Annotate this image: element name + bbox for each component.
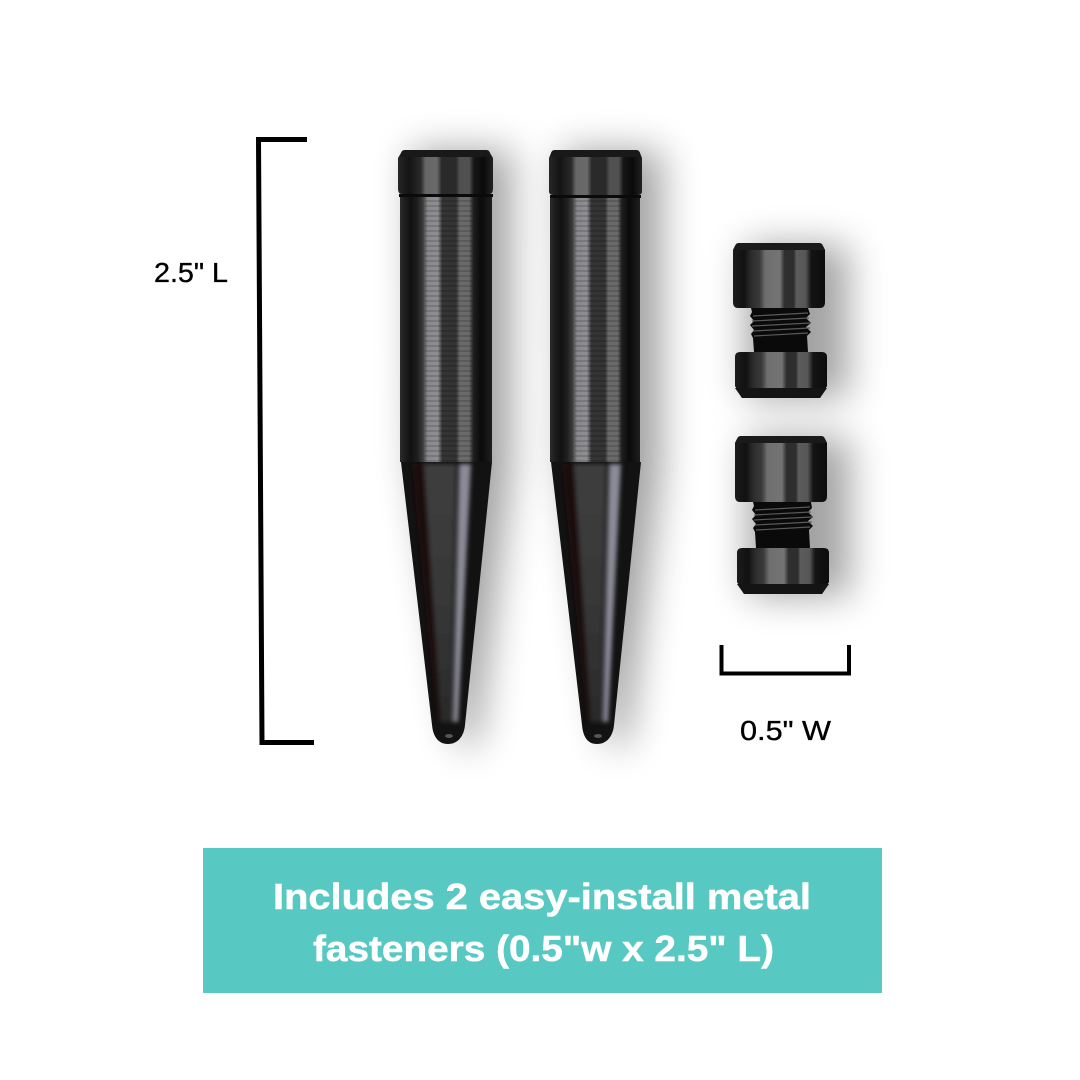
screw 1 top head [733, 243, 825, 308]
spike 2 groove [550, 195, 641, 198]
screw 1 thread [750, 308, 811, 352]
length bracket [258, 140, 314, 742]
banner line 1: Includes 2 easy-install metal [273, 876, 811, 917]
fastener spike 1 [398, 150, 493, 744]
screw 1 thread lines [752, 313, 810, 336]
screw 2 top head [735, 436, 827, 502]
screw 2 top bevel [735, 436, 827, 443]
screw 2 thread [752, 502, 813, 548]
spike 2 cap [549, 150, 642, 195]
banner line 2: fasteners (0.5"w x 2.5" L) [313, 928, 774, 969]
spike 1 cap [398, 150, 493, 194]
spike 2 taper highlights [562, 464, 621, 722]
screw set 2 [735, 436, 829, 594]
spike 1 taper [401, 462, 492, 744]
screw 2 thread lines [754, 507, 812, 530]
spike 1 body [400, 197, 492, 462]
width bracket [722, 645, 849, 674]
spike 2 cap top bevel [551, 150, 641, 157]
banner background [203, 848, 882, 993]
spike 2 taper [551, 462, 641, 744]
spike shadows [412, 150, 850, 745]
screw 1 top bevel [733, 243, 825, 250]
spike 2 tip glint [594, 734, 602, 738]
spike 1 tip glint [445, 734, 453, 738]
screw 2 bottom head [737, 548, 829, 594]
screw 2 bottom bevel [737, 584, 829, 594]
spike 1 taper highlights [412, 464, 471, 722]
spike 2 body [550, 197, 640, 462]
screw 1 bottom bevel [735, 388, 827, 398]
callout banner [203, 848, 882, 993]
spike 1 body striations [425, 197, 473, 462]
screw set 1 [733, 243, 827, 398]
fastener spike 2 [549, 150, 642, 744]
label: width: 0.5" W [740, 715, 832, 746]
spike 2 body striations [575, 197, 622, 462]
spike 1 groove [399, 194, 493, 197]
spike 1 cap top bevel [400, 150, 491, 157]
label: length: 2.5" L [154, 257, 228, 288]
screw 1 bottom head [735, 352, 827, 398]
